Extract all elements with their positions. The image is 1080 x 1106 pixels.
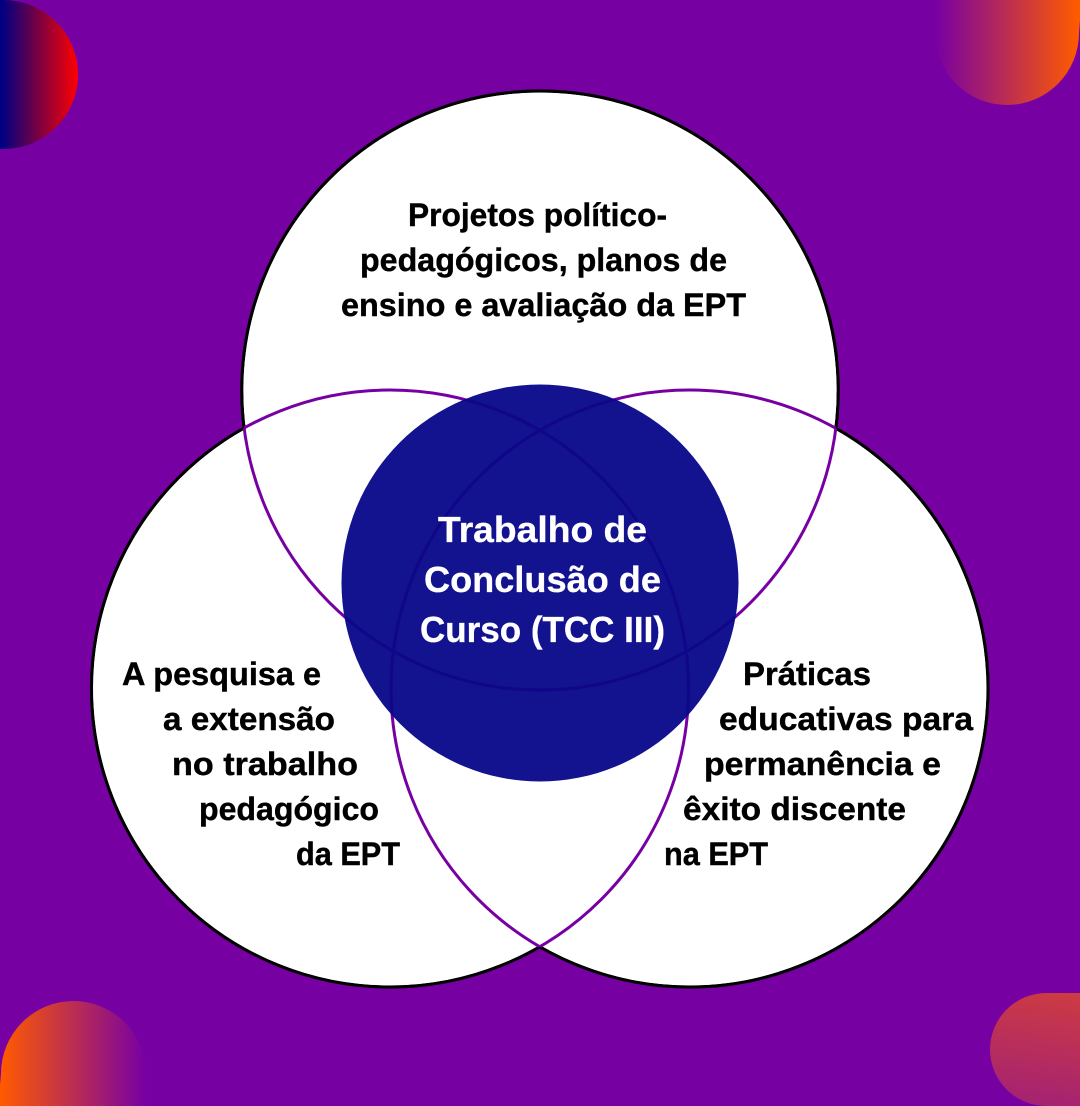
corner shape: top left: [0, 0, 78, 149]
text: right circle: na EPT: [664, 836, 768, 872]
text: left circle: [122, 656, 400, 872]
corner shape: top right: [935, 0, 1080, 105]
text: center circle: Trabalho de: [438, 509, 647, 550]
text: right circle: Práticas: [743, 656, 871, 692]
text: left circle: a extensão: [163, 701, 335, 737]
text: top circle: ensino e avaliação da EPT: [341, 287, 746, 323]
text: center circle: [420, 509, 665, 650]
corner shape: bottom right: [990, 993, 1080, 1106]
text: right circle: permanência e: [704, 746, 941, 782]
center circle: [342, 384, 738, 782]
venn inner purple arcs: [242, 388, 838, 948]
text: right circle: êxito discente: [683, 791, 906, 827]
text: right circle: educativas para: [719, 701, 973, 737]
text: left circle: A pesquisa e: [122, 656, 321, 692]
text: top circle: pedagógicos, planos de: [360, 242, 727, 278]
venn outer outlines: [92, 91, 988, 987]
center circle inner arcs: [344, 398, 736, 718]
text: top circle: [341, 197, 746, 323]
venn diagram: [92, 91, 988, 987]
text: left circle: no trabalho: [172, 746, 358, 782]
text: right circle: [664, 656, 973, 872]
text: center circle: Conclusão de: [424, 559, 661, 600]
text: center circle: Curso (TCC III): [420, 609, 665, 650]
text: left circle: da EPT: [296, 836, 400, 872]
corner shape: bottom left: [0, 1001, 146, 1106]
text: left circle: pedagógico: [199, 791, 379, 827]
venn white fills: [93, 93, 986, 985]
text: top circle: Projetos político-: [408, 197, 667, 233]
